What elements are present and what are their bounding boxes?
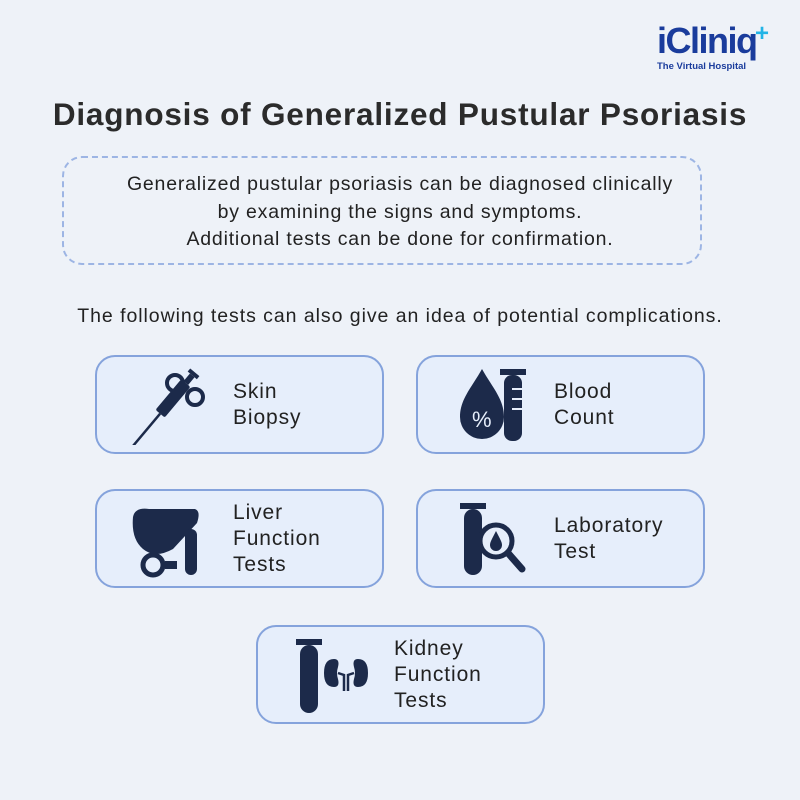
intro box: Additional tests can be done for confirmation. — [186, 228, 614, 250]
card: kidney: Kidney — [394, 636, 464, 660]
card: laboratory — [416, 489, 705, 588]
card: liver: Tests — [233, 552, 287, 576]
card: liver — [95, 489, 384, 588]
card: liver: Function — [233, 526, 321, 550]
intro box — [62, 156, 702, 265]
icon: syringe — [132, 368, 205, 445]
logo: iCliniq — [657, 20, 756, 61]
card: blood count: Count — [554, 406, 615, 428]
card: laboratory: Laboratory — [554, 514, 663, 536]
logo: + — [755, 20, 769, 47]
card: blood count: Blood — [554, 380, 612, 402]
title: Diagnosis of Generalized Pustular Psoriasis — [53, 96, 747, 132]
card: laboratory: Test — [554, 540, 596, 562]
card: kidney — [256, 625, 545, 724]
card: skin biopsy — [95, 355, 384, 454]
intro box: by examining the signs and symptoms. — [218, 200, 582, 222]
icon: test tube with magnifier — [460, 503, 526, 575]
card: kidney: Tests — [394, 688, 448, 712]
subtitle: The following tests can also give an idea of potential complications. — [77, 305, 723, 327]
icon: liver — [132, 508, 199, 578]
card: skin biopsy: Skin — [233, 380, 277, 402]
intro box: Generalized pustular psoriasis can be diagnosed clinically — [127, 173, 673, 195]
card: blood count — [416, 355, 705, 454]
card: skin biopsy: Biopsy — [233, 406, 301, 428]
card: kidney: Function — [394, 662, 482, 686]
logo: The Virtual Hospital — [657, 61, 746, 72]
icon: blood drop and tube — [460, 369, 526, 441]
icon: tube with kidneys — [296, 639, 368, 713]
icon: blood drop and tube: % — [472, 407, 492, 432]
card: liver: Liver — [233, 500, 283, 524]
